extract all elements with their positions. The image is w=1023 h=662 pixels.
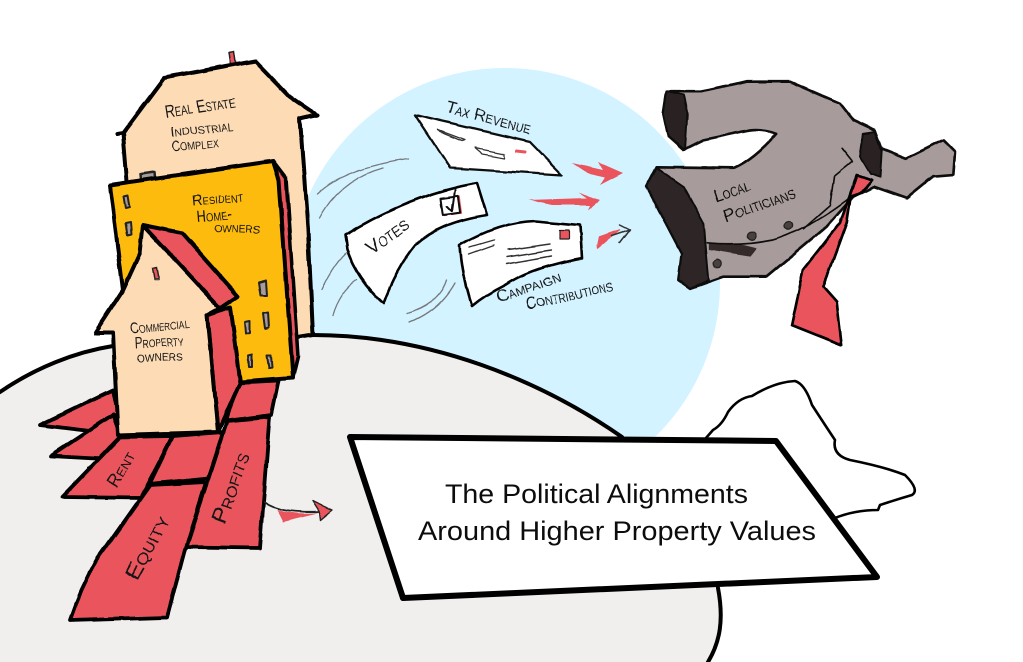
title text: Around Higher Property Values	[418, 516, 816, 546]
facade	[95, 225, 220, 435]
chimney	[229, 51, 236, 66]
label: Tax Revenue	[444, 97, 533, 138]
red strips: income streams	[40, 381, 279, 620]
label: Industrial	[171, 118, 234, 141]
jacket body	[647, 82, 955, 288]
address lines	[469, 240, 551, 264]
strip 2	[51, 415, 122, 459]
label	[493, 267, 615, 314]
label	[163, 91, 237, 156]
lapel line	[707, 148, 853, 244]
windows	[124, 196, 272, 368]
hill outline	[0, 335, 721, 662]
arrow from strips to title	[264, 501, 333, 522]
card shape	[415, 115, 562, 175]
label	[130, 315, 190, 366]
yellow facade	[110, 161, 293, 382]
red arrows to politicians	[528, 162, 630, 248]
strip 1	[40, 390, 118, 431]
label: Campaign	[493, 267, 563, 307]
hand-drawn illustration	[40, 51, 955, 620]
strip: rent	[62, 436, 173, 498]
jacket: local politicians	[647, 82, 955, 345]
title panel	[350, 437, 877, 598]
building: real estate industrial complex	[117, 51, 317, 340]
label: Votes	[362, 214, 413, 259]
panel shape	[350, 437, 877, 598]
label: Complex	[171, 134, 220, 156]
strip: rent: Rent	[103, 448, 140, 492]
label: Contributions	[525, 276, 615, 314]
title text: The Political Alignments	[445, 479, 748, 509]
card: campaign contributions	[460, 221, 615, 314]
necktie	[792, 175, 872, 345]
strip: profits	[186, 417, 270, 548]
label: Home-	[196, 206, 233, 226]
stamp	[560, 230, 569, 239]
label	[192, 189, 260, 238]
label: Local	[711, 175, 753, 206]
label: owners	[137, 347, 183, 366]
label: Politicians	[721, 182, 799, 226]
blue circle background	[290, 68, 720, 498]
arrow 2	[528, 192, 600, 210]
red side wall	[207, 307, 240, 432]
label: Property	[134, 332, 185, 352]
middle strip	[150, 432, 223, 484]
upper strip	[226, 381, 279, 421]
window	[152, 268, 158, 280]
card: tax revenue	[415, 97, 562, 175]
envelope marks	[438, 130, 525, 158]
small grey vent	[141, 172, 156, 184]
strip: profits: Profits	[206, 449, 255, 527]
cloud	[706, 381, 915, 518]
hem shadow	[708, 243, 757, 257]
roof side	[143, 225, 238, 308]
red shadow	[416, 115, 562, 175]
card shape	[345, 183, 487, 303]
arrow 3	[598, 225, 630, 248]
card shape	[460, 221, 582, 306]
label: Resident	[192, 189, 244, 210]
strip: equity	[70, 482, 206, 620]
label: Real Estate	[163, 91, 237, 122]
grey hill	[0, 335, 722, 662]
label: Commercial	[130, 315, 190, 338]
checkbox	[441, 190, 462, 216]
motion lines	[318, 159, 455, 322]
building: resident homeowners	[110, 161, 298, 382]
buttons	[714, 221, 793, 268]
collar	[860, 132, 882, 177]
red side wall	[273, 161, 298, 378]
title text	[418, 479, 816, 546]
upper cuff	[663, 92, 687, 150]
large cuff	[647, 168, 708, 288]
arrow 1	[572, 162, 623, 185]
card: votes	[345, 183, 487, 303]
big house body	[117, 61, 317, 340]
building: commercial property owners	[95, 225, 240, 435]
strip: equity: Equity	[119, 510, 175, 584]
label: owners	[214, 219, 260, 238]
